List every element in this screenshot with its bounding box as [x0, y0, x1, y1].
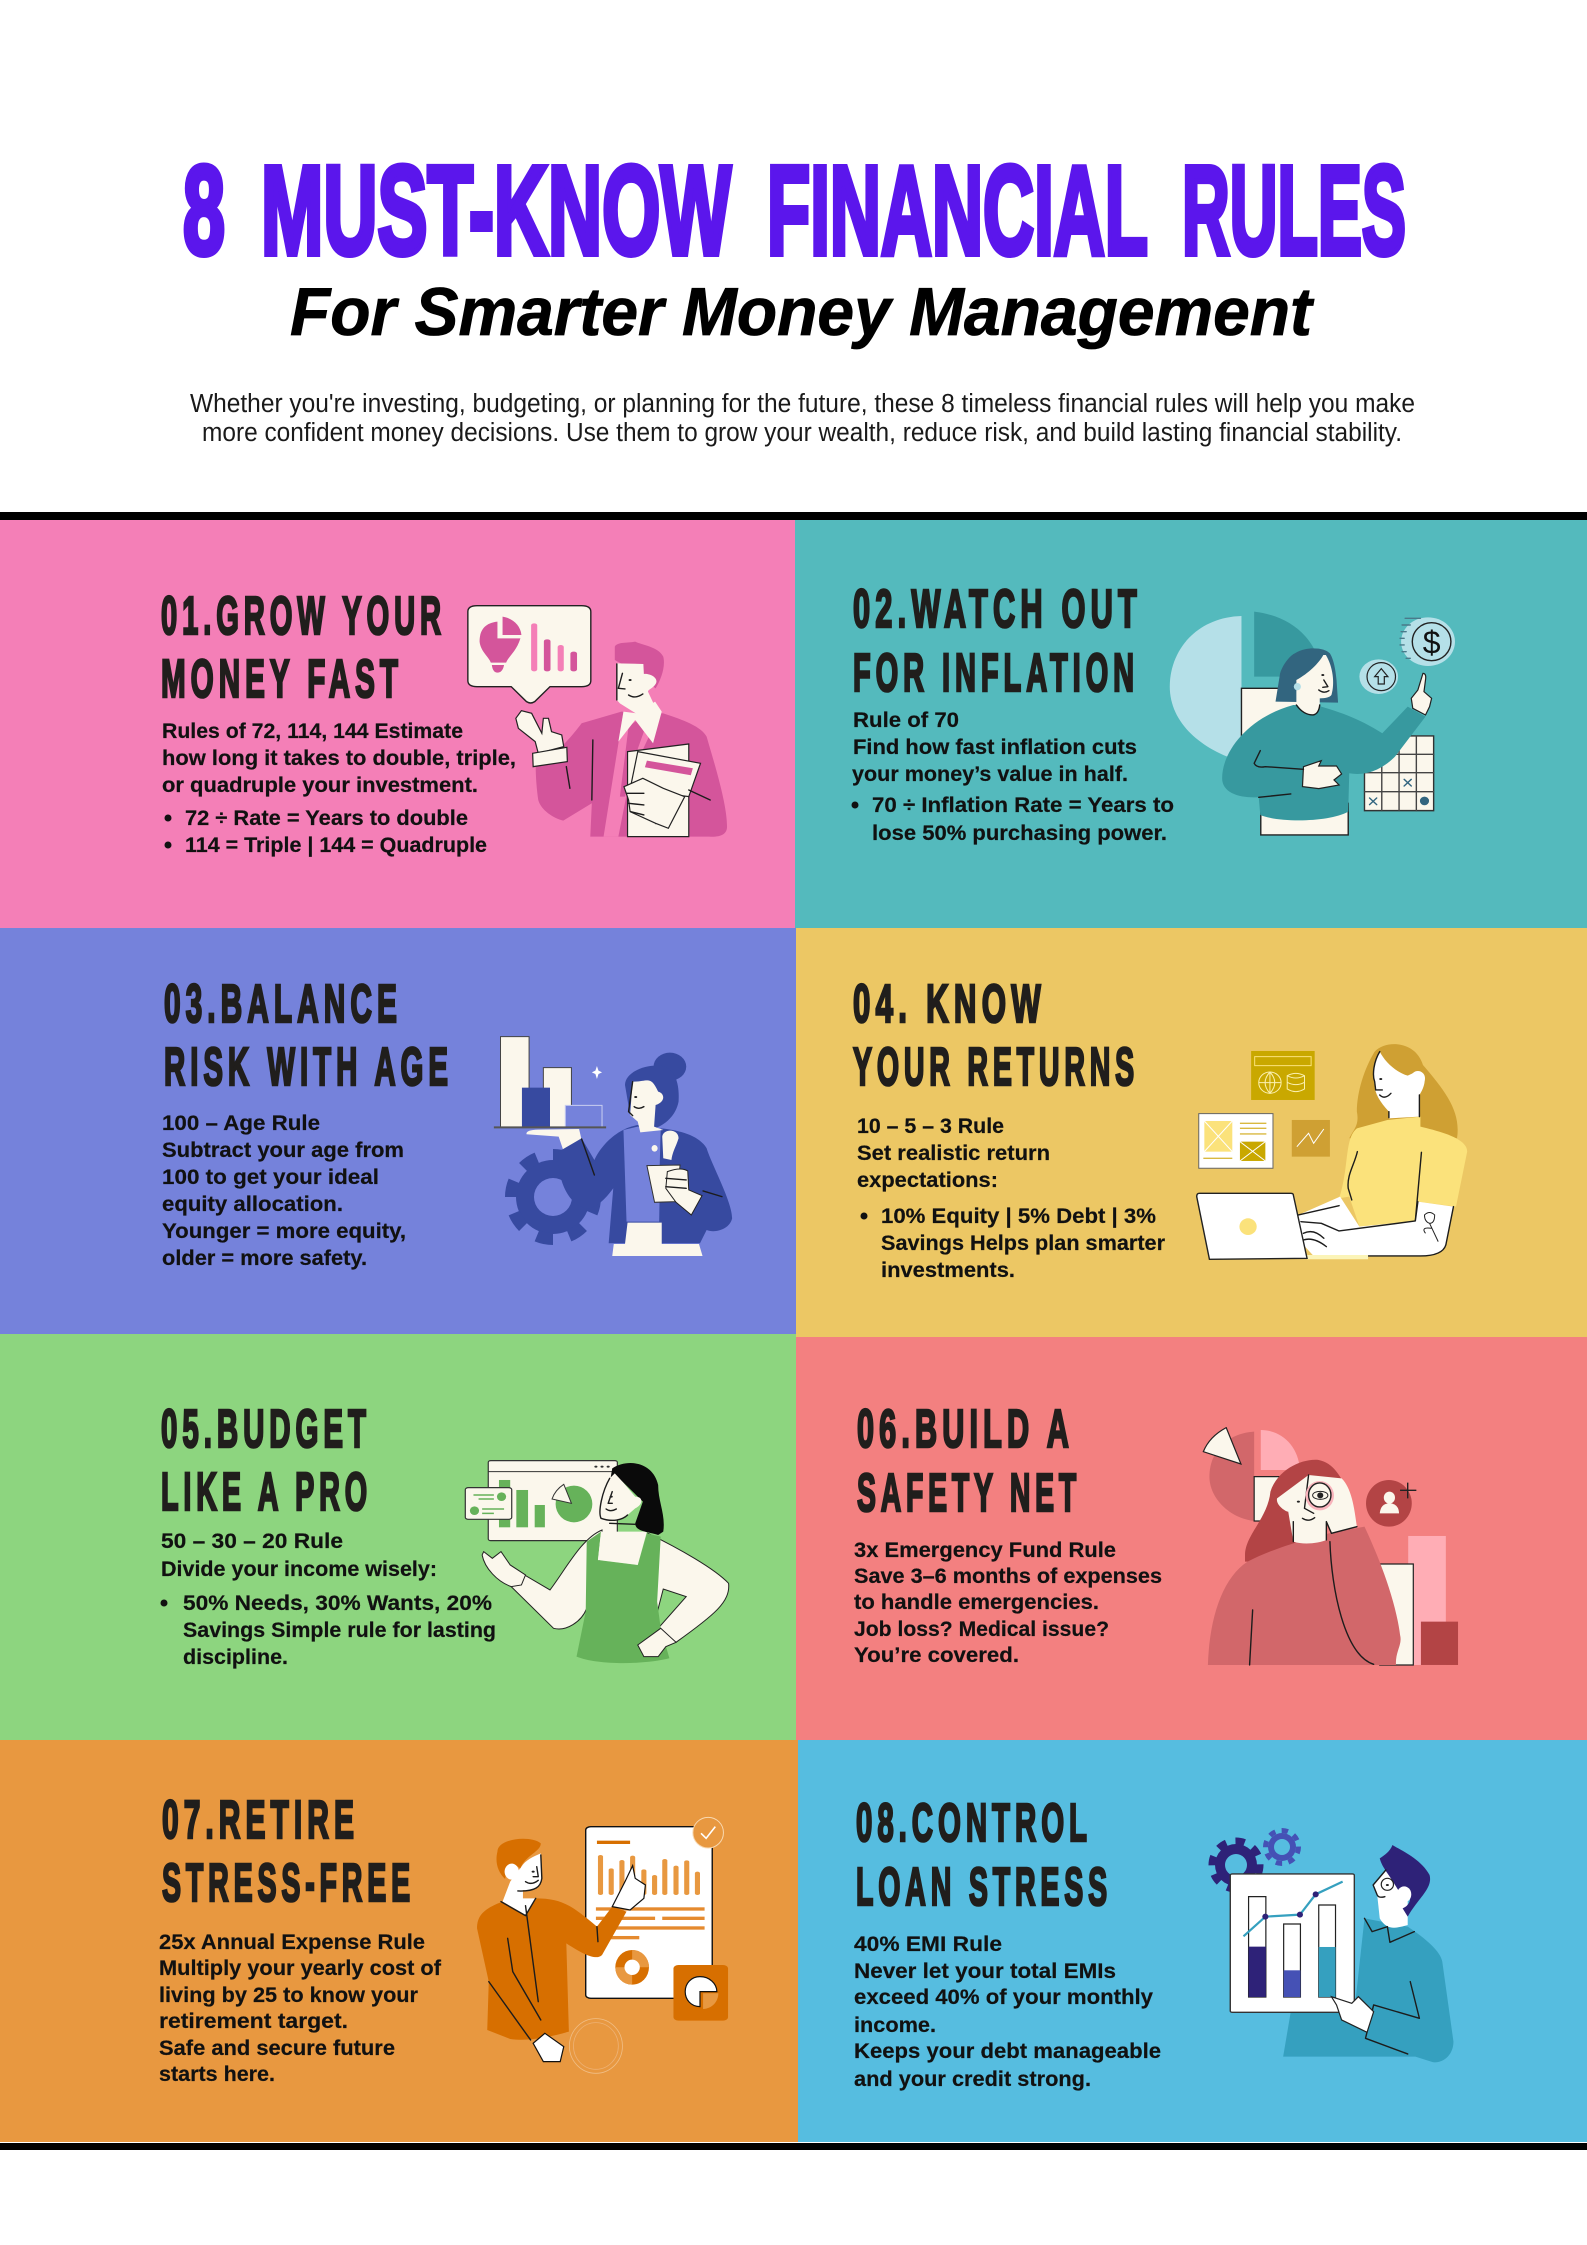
heading 02: 02.WATCH OUT: [853, 580, 1142, 639]
body text 03: [162, 1111, 406, 1270]
subtitle: For Smarter Money Management: [290, 274, 1314, 350]
body text 07: Multiply your yearly cost of: [159, 1956, 442, 1980]
illustration: woman with magnifier and charts: [1203, 1428, 1458, 1665]
icon: dollar sign: $: [1423, 625, 1441, 661]
heading 05: LIKE A PRO: [161, 1463, 372, 1522]
title: [183, 140, 1406, 281]
body text 03: Subtract your age from: [162, 1138, 404, 1162]
heading 05: 05.BUDGET: [161, 1400, 371, 1459]
body text 06: 3x Emergency Fund Rule: [854, 1538, 1116, 1562]
title: FINANCIAL: [767, 140, 1148, 281]
body text 02: Find how fast inflation cuts: [853, 735, 1137, 759]
body text 07: [159, 1930, 442, 2086]
body text 02: Rule of 70: [853, 708, 959, 732]
icon: small gear: [1266, 1830, 1298, 1864]
heading 03: 03.BALANCE: [164, 975, 402, 1034]
body text 01: 114 = Triple | 144 = Quadruple: [185, 833, 487, 857]
heading 03: RISK WITH AGE: [164, 1038, 453, 1097]
heading 04: YOUR RETURNS: [853, 1038, 1139, 1097]
intro text: Whether you're investing, budgeting, or planning for the future, these 8 timeless financial rules will help you make: [190, 390, 1415, 418]
body text 03: older = more safety.: [162, 1246, 367, 1270]
illustration: woman in apron with dashboard: [465, 1461, 729, 1663]
body text 07: starts here.: [159, 2062, 275, 2086]
body text 06: You’re covered.: [854, 1643, 1019, 1667]
body text 05: [160, 1529, 496, 1669]
body text 08: 40% EMI Rule: [854, 1932, 1002, 1956]
icon: large gear: [1212, 1841, 1260, 1889]
body text 01: Rules of 72, 114, 144 Estimate: [162, 719, 463, 743]
body text 04: Savings Helps plan smarter: [881, 1231, 1166, 1255]
body text 08: Never let your total EMIs: [854, 1959, 1116, 1983]
title: MUST-KNOW: [261, 140, 731, 281]
illustration: man holding bar chart board with gears: [1212, 1830, 1453, 2062]
body text 05: Divide your income wisely:: [161, 1557, 437, 1581]
illustration: woman with chart tray, gear and cup: [494, 1037, 732, 1256]
body text 03: equity allocation.: [162, 1192, 343, 1216]
body text 04: 10% Equity | 5% Debt | 3%: [881, 1204, 1156, 1228]
heading 07: STRESS-FREE: [162, 1854, 415, 1913]
body text 03: Younger = more equity,: [162, 1219, 406, 1243]
body text 04: [857, 1114, 1166, 1282]
heading 05: [161, 1400, 372, 1522]
body text 08: [854, 1932, 1161, 2091]
body text 01: or quadruple your investment.: [162, 773, 478, 797]
panel 1: grow your money fast: [0, 519, 796, 928]
body text 04: Set realistic return: [857, 1141, 1050, 1165]
body text 07: 25x Annual Expense Rule: [159, 1930, 425, 1954]
body text 05: 50% Needs, 30% Wants, 20%: [183, 1591, 492, 1615]
illustration: man with speech bubble and papers: [468, 606, 727, 837]
illustration: woman at laptop with cards: [1197, 1044, 1467, 1259]
heading 03: [164, 975, 453, 1097]
panel 3: balance risk with age: [0, 928, 796, 1334]
body text 07: Safe and secure future: [159, 2036, 395, 2060]
heading 08: [856, 1794, 1112, 1917]
body text 01: how long it takes to double, triple,: [162, 746, 516, 770]
bottom divider bar: [0, 2143, 1587, 2150]
body text 08: income.: [854, 2013, 936, 2037]
heading 08: 08.CONTROL: [856, 1794, 1092, 1853]
body text 04: investments.: [881, 1258, 1015, 1282]
panel 5: budget like a pro: [0, 1334, 796, 1740]
body text 06: Save 3–6 months of expenses: [854, 1564, 1162, 1588]
heading 02: FOR INFLATION: [853, 644, 1139, 703]
body text 01: 72 ÷ Rate = Years to double: [185, 806, 468, 830]
panel 7: retire stress-free: [0, 1740, 798, 2142]
heading 07: 07.RETIRE: [162, 1791, 359, 1850]
heading 08: LOAN STRESS: [856, 1858, 1112, 1917]
body text 08: exceed 40% of your monthly: [854, 1985, 1153, 2009]
intro text: more confident money decisions. Use them to grow your wealth, reduce risk, and build lasting financial stability.: [202, 419, 1402, 447]
heading 07: [162, 1791, 415, 1913]
illustration: woman pointing at coins: [1170, 612, 1455, 835]
illustration: man presenting a report: [477, 1817, 728, 2073]
body text 05: 50 – 30 – 20 Rule: [161, 1529, 343, 1553]
panel 8: control loan stress: [798, 1740, 1587, 2142]
body text 07: retirement target.: [159, 2009, 348, 2033]
heading 06: SAFETY NET: [857, 1464, 1081, 1523]
body text 07: living by 25 to know your: [159, 1983, 419, 2007]
body text 05: Savings Simple rule for lasting: [183, 1618, 496, 1642]
panel 2: watch out for inflation: [795, 519, 1587, 928]
body text 08: and your credit strong.: [854, 2067, 1091, 2091]
body text 03: 100 to get your ideal: [162, 1165, 379, 1189]
body text 03: 100 – Age Rule: [162, 1111, 320, 1135]
heading 01: [161, 587, 446, 709]
body text 08: Keeps your debt manageable: [854, 2039, 1161, 2063]
heading 04: [853, 975, 1139, 1097]
intro text: [190, 390, 1415, 447]
heading 01: MONEY FAST: [161, 650, 403, 709]
body text 04: expectations:: [857, 1168, 998, 1192]
body text 06: Job loss? Medical issue?: [854, 1617, 1109, 1641]
heading 06: [857, 1400, 1081, 1523]
body text 02: lose 50% purchasing power.: [872, 821, 1167, 845]
heading 06: 06.BUILD A: [857, 1400, 1074, 1459]
body text 05: discipline.: [183, 1645, 288, 1669]
top divider bar: [0, 512, 1587, 520]
heading 01: 01.GROW YOUR: [161, 587, 446, 646]
body text 02: [852, 708, 1174, 845]
body text 06: to handle emergencies.: [854, 1590, 1099, 1614]
body text 01: [162, 719, 516, 857]
body text 06: [854, 1538, 1162, 1667]
panel 4: know your returns: [796, 928, 1587, 1337]
heading 04: 04. KNOW: [853, 975, 1046, 1034]
icon: gear: [511, 1155, 595, 1239]
panel 6: build a safety net: [796, 1337, 1587, 1740]
body text 04: 10 – 5 – 3 Rule: [857, 1114, 1004, 1138]
heading 02: [853, 580, 1142, 703]
body text 02: your money’s value in half.: [852, 762, 1128, 786]
title: 8: [183, 140, 225, 281]
body text 02: 70 ÷ Inflation Rate = Years to: [872, 793, 1174, 817]
